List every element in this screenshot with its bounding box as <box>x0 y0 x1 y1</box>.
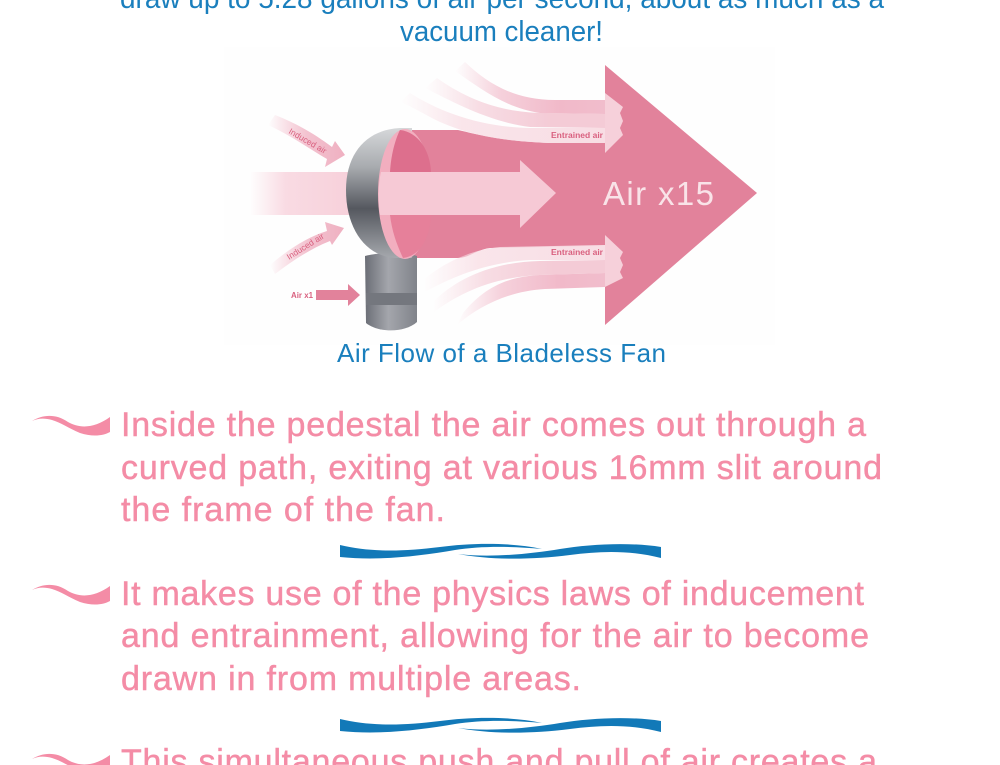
lower entrained air streams <box>423 245 605 325</box>
upper entrained air streams <box>400 62 605 143</box>
entrained air heads <box>605 93 623 287</box>
bullet text: curved path, exiting at various 16mm slit around <box>121 449 882 487</box>
icon: pink swoosh <box>32 416 110 436</box>
induced air arrows: Induced air <box>287 126 329 156</box>
intro text: vacuum cleaner! <box>400 16 603 48</box>
bullet text <box>121 575 869 698</box>
entrained air labels: Entrained air <box>551 247 604 257</box>
main arrow: air x15 <box>400 65 757 325</box>
bullet text: the frame of the fan. <box>121 491 445 529</box>
diagram: air flow of a bladeless fan <box>224 47 775 345</box>
entrained air labels <box>551 130 604 257</box>
fan pedestal <box>365 253 417 330</box>
intro text <box>120 0 885 48</box>
bullet text: It makes use of the physics laws of inducement <box>121 575 865 613</box>
induced air arrows: Induced air <box>285 231 326 262</box>
icon: pink swoosh <box>32 585 110 605</box>
air opening <box>378 129 432 259</box>
induced air arrows <box>268 115 345 274</box>
icon: pink swoosh <box>32 754 110 765</box>
air x1 arrow: Air x1 <box>291 290 313 300</box>
bullet 1 <box>32 406 882 529</box>
bullet text: drawn in from multiple areas. <box>121 660 581 698</box>
incoming air band <box>250 172 352 215</box>
entrained air labels: Entrained air <box>551 130 604 140</box>
divider: blue wave <box>340 544 661 559</box>
bullet 2 <box>32 575 869 698</box>
divider: blue wave <box>340 718 661 733</box>
air x15 label: Air x15 <box>603 175 714 212</box>
fan ring <box>346 128 412 258</box>
caption: Air Flow of a Bladeless Fan <box>337 338 666 368</box>
bullet 3 <box>32 743 877 765</box>
air x1 arrow <box>291 284 360 306</box>
central air arrow <box>379 160 556 228</box>
bullet text <box>121 406 882 529</box>
bullet text: and entrainment, allowing for the air to become <box>121 617 869 655</box>
bullet text: Inside the pedestal the air comes out through a <box>121 406 866 444</box>
